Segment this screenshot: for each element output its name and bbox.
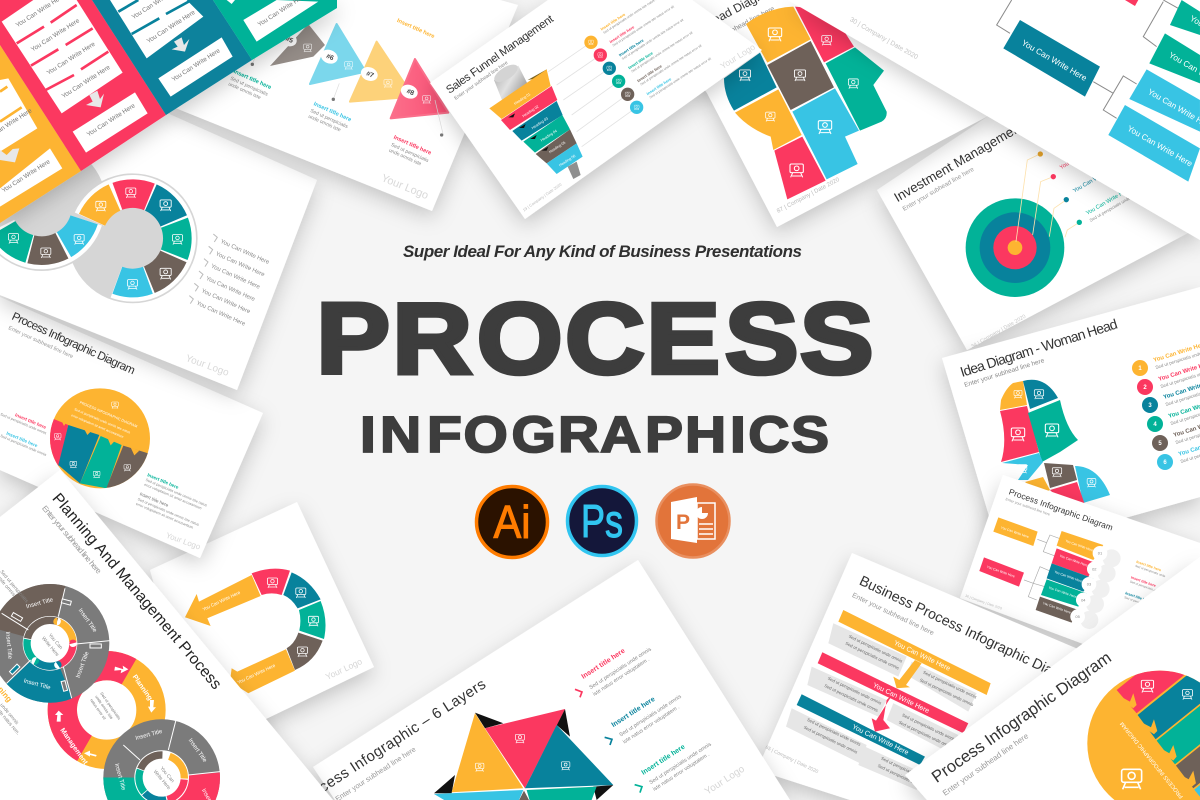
slide: investment management target: You Can Write Here <box>1059 141 1105 171</box>
woman head segments <box>1000 380 1110 505</box>
slide: process infographic diagram small: Sed ut perspiciatis unde <box>1124 595 1155 610</box>
slide: business process infographic: Sed ut perspiciatis unde omnis <box>901 712 957 742</box>
numbered list: 4 <box>1153 422 1157 428</box>
slide: process infographic diagram small: 01 <box>1098 551 1103 556</box>
slide: planning and management process: unde omnis iste <box>94 694 115 721</box>
slide: coloured flow columns: You Can Write Here <box>1 158 52 194</box>
slide: process infographic diagram circle: Sed ut perspiciatis unde omnis iste natus <box>145 478 208 508</box>
slide: process infographic diagram circle: PROCESS INFOGRAPHIC DIAGRAM <box>79 401 138 429</box>
puzzle notches <box>9 599 101 691</box>
slide: sales funnel management: Insert title here <box>627 50 654 70</box>
head: blue <box>792 88 859 179</box>
numbered list: 6 <box>1163 460 1167 466</box>
slide: process infographic diagram small: Insert title here <box>1130 575 1156 588</box>
slide: 6 layers infographic: Your Logo <box>703 763 747 797</box>
slide: U arrow process: You Can Write Here <box>237 663 276 685</box>
slide: process infographic diagram circle: error voluptatem sit amet accusantium <box>144 483 202 510</box>
slide: process infographic diagram small: You Can Write Here <box>1059 554 1088 567</box>
head: brown centre <box>767 41 834 110</box>
slide: planning and management process: Write Here <box>152 769 172 791</box>
slide: planning and management process: Insert Title <box>4 631 12 660</box>
head: green face <box>826 47 887 131</box>
slide: process infographic diagram small: Sed ut perspiciatis unde <box>1129 579 1161 594</box>
slide: process infographic diagram circle: error voluptatem sit amet accusantium <box>71 413 124 439</box>
funnel: Heading 05 <box>548 141 566 154</box>
head: yellow middle <box>735 89 802 150</box>
icon: Adobe Photoshop <box>568 486 636 556</box>
slide: wave circle process <box>0 100 317 390</box>
slide: big process infographic diagram: PROCESS INFOGRAPHIC DIAGRAM <box>1119 720 1185 799</box>
slide: business process infographic: Sed ut perspiciatis unde omnis <box>919 677 974 707</box>
slide: planning and management process: natus error sit <box>89 698 108 721</box>
funnel: Heading 04 <box>540 129 558 142</box>
slide: investment management target <box>877 115 1188 350</box>
slide: business process infographic: You Can Write Here <box>851 724 910 757</box>
icon: Adobe Photoshop: Ps <box>581 495 623 547</box>
head: red top <box>795 7 854 62</box>
circular diagram 2 <box>103 719 220 800</box>
slide: process infographic diagram circle <box>0 297 263 558</box>
icon: Adobe Illustrator: Ai <box>494 496 530 548</box>
slide: business process infographic <box>757 553 1085 800</box>
slide: sales funnel management: Insert title here <box>599 11 627 32</box>
slide: process infographic diagram small: You Can Write Here <box>1065 539 1094 552</box>
white boxes <box>0 0 318 207</box>
slide: triangles process: Sed ut perspiciatis <box>390 142 430 164</box>
slide: sales funnel management: Sed ut perspiciatis unde omnis iste natus error sit <box>639 44 703 86</box>
slide: triangles process: Your Logo <box>380 172 430 202</box>
list: You Can Write Here <box>214 251 266 279</box>
slide: investment management target: Enter your subhead line here <box>901 166 976 213</box>
slide: investment management target: 34 | Company | Date 2020 <box>970 314 1027 350</box>
slide: top right flow boxes: You Can Write Here <box>1126 123 1195 169</box>
head: yellow top <box>746 7 811 63</box>
slide: planning and management process: Insert Title <box>23 678 52 692</box>
slide: coloured flow columns: You Can Write Here <box>30 17 81 53</box>
slide: business process infographic: You Can Write Here <box>892 640 951 673</box>
slide: process infographic diagram small: You Can Write Here <box>986 565 1016 578</box>
slide: process infographic diagram small: Sed ut perspiciatis unde <box>1135 564 1166 578</box>
slide: planning and management process: You Can <box>158 766 175 784</box>
slide: process infographic diagram circle: Sed ut perspiciatis unde omnis <box>0 412 47 435</box>
slide: coloured flow columns: You Can Write Here <box>146 9 197 45</box>
slide: planning and management process: Insert Title <box>113 763 126 792</box>
icon: Adobe Illustrator <box>476 486 548 558</box>
slide: triangles process <box>173 0 518 211</box>
slide: process infographic diagram small: You Can Write Here <box>1054 570 1083 583</box>
slide: investment management target: You Can Write Here <box>1072 164 1119 194</box>
slide: process infographic diagram circle: Insert title here <box>6 431 39 448</box>
slide: human head diagram: 87 | Company | Date 2020 <box>776 177 841 215</box>
slide: planning and management process: Planning And Management Process <box>49 490 225 693</box>
slide: 6 layers infographic: Insert title here <box>611 696 657 729</box>
slide: investment management target: You Can Write Here <box>1085 187 1132 217</box>
row separators <box>0 0 192 122</box>
circular diagram <box>1087 670 1200 800</box>
slide: business process infographic: You Can Write Here <box>871 682 930 715</box>
numbered list: 2 <box>1143 385 1147 391</box>
icon: PowerPoint <box>656 484 730 558</box>
slide: business process infographic: Business Process Infographic Diagram <box>857 573 1085 693</box>
circular diagram 1 <box>0 584 110 703</box>
slide: process infographic diagram circle: Process Infographic Diagram <box>10 310 137 377</box>
slide: sales funnel management: Insert title here <box>645 76 673 96</box>
slide: 6 layers infographic: Sed ut perspiciatis unde omnis <box>588 646 653 691</box>
slide: business process infographic: Sed ut perspiciatis unde omnis <box>803 725 858 755</box>
slide: coloured flow columns: You Can Write Here <box>61 64 112 100</box>
slide: triangles process: unde omnis iste <box>307 114 342 133</box>
slide: triangles process: #8 <box>405 88 415 97</box>
slide: idea diagram woman head: Idea Diagram - Woman Head <box>958 316 1119 380</box>
slide: business process infographic: Sed ut perspiciatis unde omnis <box>845 641 900 671</box>
chevrons <box>575 689 642 793</box>
slide: triangles process: Sed ut perspiciatis <box>309 108 349 130</box>
slide: planning and management process: Insert Title <box>26 597 54 610</box>
list <box>195 239 271 328</box>
slide: planning and management process: Insert Title <box>76 650 91 679</box>
slide: human head diagram: Enter your subhead line here <box>693 6 776 54</box>
slide: sales funnel management: Insert title here <box>608 24 636 44</box>
slide: investment management target: Investment Management <box>891 118 1026 205</box>
slide: human head diagram <box>640 0 990 227</box>
slide: planning and management process: You Can <box>47 632 64 651</box>
slide: business process infographic: Sed ut perspiciatis unde omnis <box>806 717 862 747</box>
connector lines <box>548 42 637 147</box>
slide: planning and management process: Write Here <box>40 636 60 658</box>
funnel: Heading 06 <box>558 154 576 167</box>
slide: triangles process: #5 <box>284 36 294 45</box>
slide: coloured flow columns: You Can Write Here <box>171 47 222 83</box>
slide: business process infographic: 65 | Company | Date 2020 <box>764 745 819 775</box>
slide: planning and management process: Insert Title <box>135 729 164 742</box>
slide: business process infographic: Sed ut perspiciatis unde omnis <box>880 756 936 786</box>
slide: process infographic diagram small: 02 <box>1092 566 1097 571</box>
slide: sales funnel management: Enter your subhead line here <box>453 60 509 102</box>
circle with stripes <box>50 388 150 488</box>
slide: process infographic diagram circle: Insert title here <box>14 412 47 430</box>
slide: business process infographic: Sed ut perspiciatis unde omnis <box>848 634 903 664</box>
funnel step circles <box>584 36 643 114</box>
funnel <box>489 61 583 179</box>
slide: process infographic diagram small: 36 | Company | Date 2020 <box>965 594 1003 611</box>
icon: PowerPoint: P <box>676 511 690 534</box>
flow arrows <box>0 37 189 162</box>
funnel: Heading 03 <box>531 117 549 130</box>
slide: idea diagram woman head <box>942 287 1200 553</box>
slide: planning and management process: Enter your subhead line here <box>40 504 104 576</box>
slide: investment management target: Sed ut perspiciatis unde omnis <box>1089 189 1142 223</box>
slide: top right flow boxes: You Can Write Here <box>1020 37 1089 83</box>
main title: PROCESS: PROCESS <box>316 284 873 395</box>
slide: process infographic diagram small: Insert title here <box>1125 591 1151 604</box>
slide: process infographic diagram small: You Can Write Here <box>1000 525 1030 539</box>
slide: wave circle process: Your Logo <box>184 353 231 379</box>
slide: big process infographic diagram <box>905 557 1200 800</box>
numbered list <box>1132 360 1173 470</box>
slide: business process infographic: Sed ut perspiciatis unde omnis <box>824 683 879 713</box>
slide: planning and management process: Insert Title <box>187 738 208 764</box>
slide: sales funnel management <box>430 0 762 219</box>
list: You Can Write Here <box>195 301 247 328</box>
slide: big process infographic diagram: Process Infographic Diagram <box>928 648 1115 787</box>
slide: business process infographic: Sed ut perspiciatis unde omnis <box>922 670 978 700</box>
slide: sales funnel management: Insert title here <box>636 63 663 83</box>
numbered list: 5 <box>1158 441 1162 447</box>
star triangles <box>434 709 613 800</box>
head: teal back <box>724 53 777 111</box>
numbered list: 3 <box>1148 403 1152 409</box>
slide: triangles process: #6 <box>325 53 335 62</box>
slide: planning and management process: Sed ut perspiciatis <box>99 691 122 721</box>
slide: process infographic diagram small: You Can Write Here <box>1042 601 1072 615</box>
gray detail panels <box>786 623 977 790</box>
slide: triangles process: Insert title here <box>396 18 435 40</box>
slide: business process infographic: Sed ut perspiciatis unde omnis <box>877 763 932 793</box>
head: red lower <box>774 137 826 199</box>
slide: sales funnel management: Insert title here <box>618 37 645 57</box>
numbered list: 1 <box>1138 366 1142 372</box>
slide: sales funnel management: Sed ut perspiciatis unde omnis iste natus error sit <box>649 57 712 99</box>
slide: triangles process: unde omnis iste <box>388 148 422 167</box>
slide: process infographic diagram small <box>960 475 1200 690</box>
slide: sales funnel management: 19 | Company | Date 2020 <box>522 181 563 212</box>
slide: coloured flow columns: You Can Write Here <box>86 102 137 138</box>
list: You Can Write Here <box>219 239 271 266</box>
slide: business process infographic: Sed ut perspiciatis unde omnis <box>898 720 953 750</box>
slide: process infographic diagram small: 03 <box>1087 582 1092 587</box>
slide: big process infographic diagram: Enter your subhead line here <box>941 731 1031 798</box>
slide: 6 layers infographic: iste natus error voluptatem . <box>652 752 711 793</box>
slide: sales funnel management: Sed ut perspiciatis unde omnis iste natus error sit <box>612 5 675 48</box>
slide: process infographic diagram circle: Sed ut perspiciatis unde omnis <box>0 434 47 457</box>
slide: idea diagram woman head: Enter your subhead line here <box>964 357 1046 389</box>
head icons <box>739 28 858 177</box>
slide: business process infographic: Sed ut perspiciatis unde omnis <box>827 676 882 706</box>
slide: 6 layers infographic: Sed ut perspiciatis unde omnis <box>618 694 683 738</box>
slide: process infographic diagram small: You Can Write Here <box>1048 585 1077 599</box>
middle ring <box>46 649 167 771</box>
funnel: Heading 02 <box>522 105 540 118</box>
slide: sales funnel management: Your Logo <box>718 42 757 71</box>
slide: process infographic diagram small: Enter your subhead line here <box>1005 497 1051 517</box>
slide: 6 layers infographic: Insert title here <box>641 744 687 777</box>
slide: U arrow process: You Can Write Here <box>202 590 241 612</box>
subtitle: INFOGRAPHICS: INFOGRAPHICS <box>360 407 829 463</box>
slide: process infographic diagram circle: Sed ut perspiciatis unde omnis iste natus <box>137 497 200 527</box>
slide: 6 layers infographic: Insert title here <box>581 648 627 681</box>
slide: planning and management process: Planning <box>131 674 153 702</box>
slide: process infographic diagram circle: Your Logo <box>165 531 202 552</box>
slide: process infographic diagram circle: Insert title here <box>147 472 180 490</box>
slide: coloured flow columns: You Can Write Here <box>46 40 97 77</box>
slide: business process infographic: Enter your subhead line here <box>851 592 935 637</box>
slide: process infographic diagram circle: Sed ut perspiciatis unde omnis iste natus <box>74 407 131 435</box>
slide: U arrow process: Your Logo <box>324 656 364 682</box>
slide: process infographic diagram small: Insert title here <box>1136 560 1162 572</box>
slide: sales funnel management: Sales Funnel Management <box>444 13 557 96</box>
slide: planning and management process: Management <box>58 727 89 767</box>
slide: triangles process: #7 <box>365 70 375 80</box>
slide: triangles process: Insert title here <box>392 135 432 157</box>
slide: process infographic diagram circle: Insert title here <box>139 491 170 508</box>
slide: top right flow boxes <box>788 0 1200 240</box>
slide: process infographic diagram circle: error voluptatem sit amet accusantium <box>135 502 194 530</box>
slide: 6 layers infographic: iste natus error voluptatem . <box>592 657 651 698</box>
slide: U arrow process <box>150 502 374 750</box>
slide: top right flow boxes: 30 | Company | Date 2020 <box>848 16 919 61</box>
wave ring chart <box>0 141 198 303</box>
slide: 6 layers infographic: iste natus error voluptatem . <box>622 704 681 745</box>
slide: 6 layers infographic: Sed ut perspiciatis unde omnis <box>648 741 713 786</box>
slide: coloured flow columns <box>0 0 337 223</box>
slide: triangles process: Sed ut perspiciatis <box>229 76 269 98</box>
slide: sales funnel management: Sed ut perspiciatis unde omnis iste natus error sit <box>630 31 694 73</box>
slide: triangles process: Insert title here <box>312 101 352 123</box>
slide: planning and management process: Insert Title <box>77 608 98 634</box>
slide: triangles process: unde omnis iste <box>227 81 262 101</box>
slide: process infographic diagram small: Process Infographic Diagram <box>1008 486 1114 533</box>
slide: process infographic diagram small: 05 <box>1075 614 1081 619</box>
list: You Can Write Here <box>200 288 252 316</box>
funnel: Heading 01 <box>513 92 531 106</box>
slide: sales funnel management: Sed ut perspiciatis unde omnis iste natus error sit <box>621 18 684 61</box>
list: You Can Write Here <box>205 276 256 303</box>
list: You Can Write Here <box>210 264 261 291</box>
tagline: Super Ideal For Any Kind of Business Presentations <box>403 242 802 261</box>
slide: process infographic diagram circle: Enter your subhead line here <box>7 325 74 360</box>
slide: triangles process: Insert title here <box>232 69 272 91</box>
slide: planning and management process <box>0 470 333 800</box>
slide: 6 layers infographic <box>295 560 790 800</box>
slide: process infographic diagram small: 04 <box>1081 597 1086 602</box>
